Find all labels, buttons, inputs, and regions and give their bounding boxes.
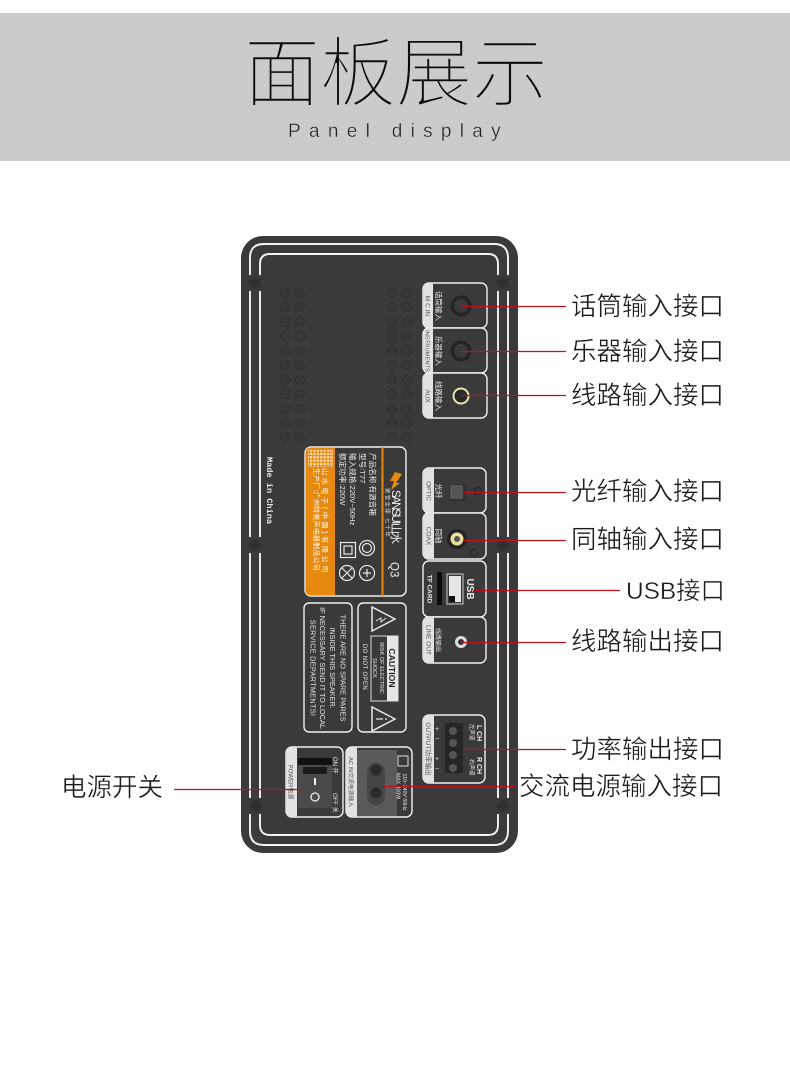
module: power switch: POWER电源: [286, 765, 294, 799]
module: power output terminal: −: [435, 766, 439, 773]
service notice box: THERE ARE NO SPARE PARES: [338, 615, 348, 722]
service notice box: [304, 603, 352, 732]
callout: line output: 线路输出接口: [571, 628, 724, 656]
caution box: CAUTION: [387, 648, 397, 688]
certification marks: [340, 540, 374, 580]
orange product label: 山水电子(中国)有限公司: [320, 468, 330, 575]
module: instrument input: [423, 328, 487, 373]
warning triangle: exclamation: [372, 707, 395, 731]
service notice box: INSIDE THIS SPEAKER.: [328, 627, 337, 709]
callout: ac input: 交流电源输入接口: [519, 773, 723, 801]
module: power switch: ON 开: [331, 757, 338, 774]
module: power output terminal: [423, 715, 485, 783]
module: usb and tf card: USB: [464, 578, 475, 600]
module: power output terminal: L CH: [475, 725, 482, 741]
module: line out: LINE OUT: [424, 625, 432, 655]
module: power output terminal: −: [435, 736, 439, 743]
title: 面板展示: [244, 32, 548, 117]
callout: mic input: 话筒输入接口: [571, 293, 724, 321]
caution box: RISK OF ELECTRIC: [378, 642, 384, 694]
made in china text: Made in China: [264, 457, 274, 524]
module: instrument input: INSTRUMENTS: [424, 330, 430, 372]
module: power switch: OFF 关: [331, 793, 339, 813]
header band: [0, 13, 790, 161]
perforated dot columns: [280, 288, 412, 442]
callout: line input: 线路输入接口: [571, 382, 724, 410]
module: mic input: 话筒输入: [434, 291, 444, 321]
callout: coaxial input: 同轴输入接口: [571, 526, 724, 554]
caution plate: [371, 636, 398, 701]
orange product label: 输入规格:220V~50Hz: [348, 453, 358, 526]
module: usb and tf card: TF CARD: [426, 575, 432, 604]
module: optical input: OPTIC: [424, 481, 432, 501]
module: optical input: [423, 468, 486, 513]
double white border lines: [250, 244, 508, 845]
dot grid on label: [308, 450, 333, 467]
orange product label: 产品名称:有源音箱: [368, 453, 378, 516]
caution box: [358, 603, 406, 732]
module: power output terminal: +: [435, 726, 439, 733]
module: aux input: AUX: [424, 389, 430, 403]
module: optical input: 光纤: [434, 484, 444, 499]
module: instrument input: 乐器输入: [434, 336, 444, 366]
orange product label: 额定功率:220W: [338, 453, 348, 506]
module: mic input: M C IN: [424, 296, 430, 316]
module: power switch: [286, 747, 343, 817]
module: aux input: 线路输入: [434, 381, 444, 411]
logo mark: [390, 472, 402, 490]
module: power output terminal: 右声道: [468, 759, 476, 776]
orange product label: 生产厂:广州特美声电器制品公司: [312, 468, 321, 571]
orange product label: Q3: [388, 562, 400, 577]
service notice box: IF NECESSARY SEND IT TO LOCAL: [318, 607, 327, 729]
caution box: SHOCK: [371, 658, 377, 678]
module: ac input socket: 110~240V 50Hz: [401, 774, 407, 811]
screws: [249, 277, 509, 812]
module: ac input socket: [346, 747, 412, 817]
module: mic input: [423, 283, 487, 328]
subtitle: Panel display: [288, 121, 509, 142]
callout: power switch: 电源开关: [61, 774, 163, 802]
module: line out: [423, 617, 486, 663]
orange product label: 型号:T77: [358, 453, 367, 483]
module: line out: 线路输出: [434, 628, 442, 652]
module: ac input socket: MAX 400W: [394, 773, 400, 799]
module: aux input: [423, 373, 487, 418]
module: usb and tf card: [423, 561, 486, 617]
callout: instrument input: 乐器输入接口: [571, 338, 724, 366]
warning triangle: bolt: [372, 607, 395, 631]
sansui logo: SANSUI山水: [389, 490, 402, 544]
caution box: DO NOT OPEN: [361, 644, 367, 690]
panel: speaker back plate: [241, 236, 518, 853]
module: power output terminal: OUTPUT功率输出: [424, 722, 433, 776]
orange product label: [305, 447, 406, 596]
callout: power output: 功率输出接口: [571, 736, 724, 764]
orange product label: 荣誉全球·七十年: [384, 488, 392, 538]
module: coaxial input: [423, 513, 486, 559]
callout: usb: USB接口: [626, 578, 725, 605]
callout: optical input: 光纤输入接口: [571, 478, 724, 506]
module: power output terminal: R CH: [475, 757, 482, 774]
module: power output terminal: +: [435, 756, 439, 763]
module: power output terminal: 左声道: [468, 724, 476, 741]
service notice box: SERVICE DEPARTMENTS!: [308, 620, 318, 716]
module: ac input socket: AC IN交流电源输入: [347, 757, 355, 807]
module: coaxial input: 同轴: [434, 528, 444, 544]
module: coaxial input: COAX: [424, 527, 432, 546]
